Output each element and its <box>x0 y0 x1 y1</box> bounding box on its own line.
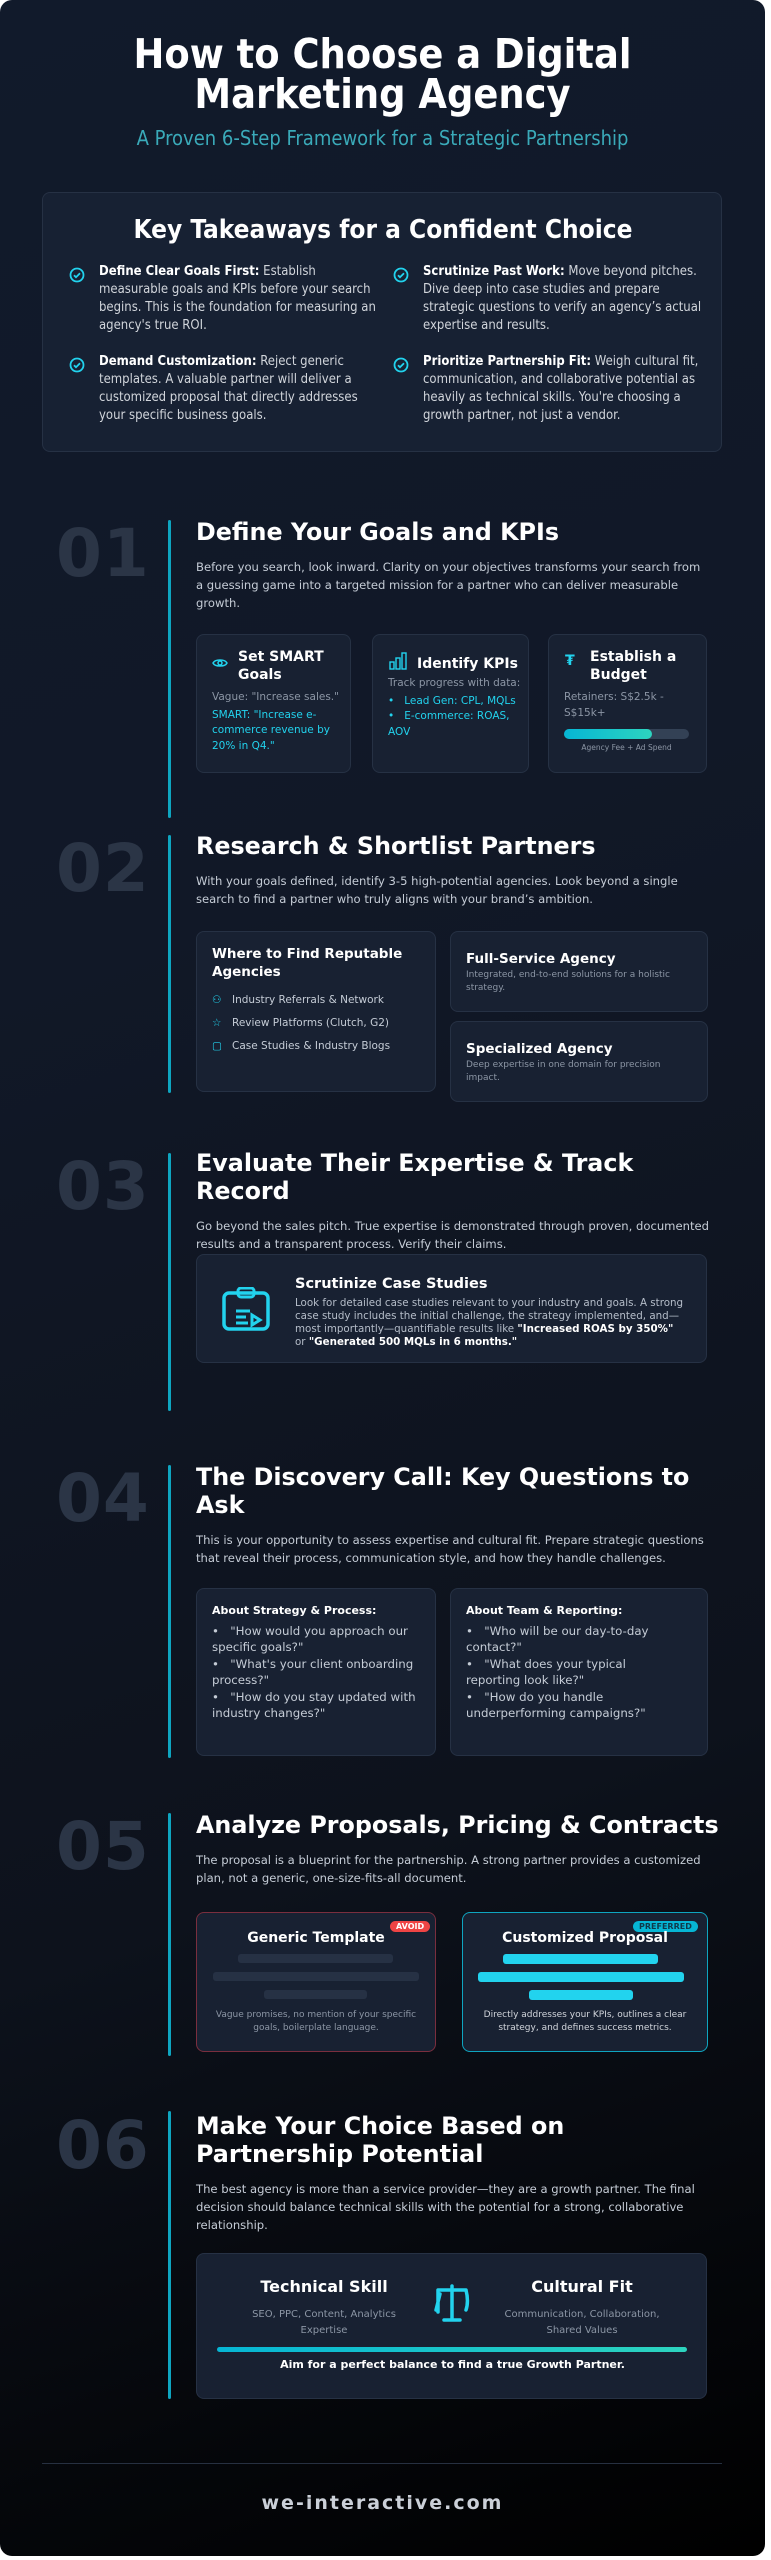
para 02: With your goals defined, identify 3-5 high-potential agencies. Look beyond a single search to find a partner who truly aligns with your brand’s ambition. <box>196 874 678 906</box>
timeline line 03 <box>168 1153 171 1411</box>
card: budget: Budget <box>590 667 647 683</box>
step number 04: 04 <box>56 1460 150 1537</box>
card: case studies: Look for detailed case studies relevant to your industry and goals. A strong case study includes the initial challenge, the strategy implemented, and—most importantly—quantifiable results like "Increased ROAS by 350%" or "Generated 500 MQLs in 6 months." <box>295 1297 683 1348</box>
card: KPIs: • Lead Gen: CPL, MQLs <box>388 694 516 706</box>
list: sources: ▢ <box>212 1040 222 1052</box>
list: sources: ☆ <box>212 1017 221 1029</box>
badge: avoid: AVOID <box>396 1922 424 1931</box>
card: generic template: Vague promises, no mention of your specific goals, boilerplate language. <box>216 2010 416 2033</box>
step number 01: 01 <box>56 515 150 592</box>
card: KPIs <box>372 634 529 773</box>
card: budget <box>548 634 707 773</box>
card: SMART goals: Set SMART <box>238 649 324 665</box>
heading 04: The Discovery Call: Key Questions to Ask <box>196 1463 689 1519</box>
step number 06: 06 <box>56 2107 150 2184</box>
card: balance <box>196 2253 707 2399</box>
step number 03: 03 <box>56 1148 150 1225</box>
takeaway 4: Prioritize Partnership Fit: Weigh cultural fit, communication, and collaborative potential as heavily as technical skills. You're choosing a growth partner, not just a vendor. <box>423 354 698 423</box>
card: balance: Cultural Fit <box>531 2277 633 2296</box>
step number 02: 02 <box>56 830 150 907</box>
icon: scale <box>434 2284 470 2322</box>
section 06 text <box>196 2112 695 2232</box>
icon: clipboard <box>222 1287 270 1331</box>
card: full-service <box>450 931 708 1012</box>
timeline line 02 <box>168 835 171 1093</box>
list: sources: ⚇ <box>212 994 221 1006</box>
icon: budget: ₮ <box>565 653 575 669</box>
card: balance: Aim for a perfect balance to find a true Growth Partner. <box>280 2358 625 2371</box>
card: strategy questions: • "How would you approach our specific goals?" <box>212 1624 408 1654</box>
card: budget: Agency Fee + Ad Spend <box>581 743 672 752</box>
card: team questions: • "How do you handle underperforming campaigns?" <box>466 1690 646 1720</box>
card: SMART goals: SMART: "Increase e-commerce revenue by 20% in Q4." <box>212 708 330 752</box>
takeaway 3: Demand Customization: Reject generic templates. A valuable partner will deliver a customized proposal that directly addresses your specific business goals. <box>99 354 358 423</box>
heading 03: Evaluate Their Expertise & Track Record <box>196 1149 633 1205</box>
takeaway 1: Define Clear Goals First: Establish measurable goals and KPIs before your search begins. This is the foundation for measuring an agency's true ROI. <box>99 264 376 333</box>
section 04 text <box>196 1463 704 1565</box>
timeline line 04 <box>168 1465 171 1758</box>
card: specialized <box>450 1021 708 1102</box>
card: strategy questions <box>196 1588 436 1756</box>
card: balance: Technical Skill <box>260 2277 388 2296</box>
para 05: The proposal is a blueprint for the partnership. A strong partner provides a customized plan, not a generic, one-size-fits-all document. <box>196 1853 701 1885</box>
budget bar <box>564 729 689 739</box>
takeaways heading: Key Takeaways for a Confident Choice <box>133 215 632 245</box>
takeaway 2: Scrutinize Past Work: Move beyond pitches. Dive deep into case studies and prepare strategic questions to verify an agency’s actual expertise and results. <box>423 264 701 333</box>
card: team questions: • "What does your typical reporting look like?" <box>466 1657 626 1686</box>
badge: avoid <box>390 1921 430 1932</box>
timeline line 01 <box>168 520 171 818</box>
section 05 text <box>196 1811 719 1885</box>
card: customized proposal: Customized Proposal <box>502 1930 668 1946</box>
card: strategy questions: • "What's your client onboarding process?" <box>212 1657 413 1686</box>
footer: website: we-interactive.com <box>262 2492 504 2514</box>
title: Marketing Agency <box>194 70 571 118</box>
card: where to find <box>196 931 436 1092</box>
para 06: The best agency is more than a service provider—they are a growth partner. The final decision should balance technical skills with the potential for a strong, collaborative relationship. <box>196 2182 695 2232</box>
card: KPIs: • E-commerce: ROAS, AOV <box>388 710 510 738</box>
card: SMART goals <box>196 634 351 773</box>
list: sources: Case Studies & Industry Blogs <box>232 1040 390 1052</box>
card: specialized: Deep expertise in one domain for precision impact. <box>466 1060 660 1083</box>
title: How to Choose a Digital <box>134 30 631 78</box>
card: generic template: Generic Template <box>247 1930 385 1946</box>
card: generic template <box>196 1912 436 2052</box>
card: balance: Communication, Collaboration, Shared Values <box>504 2309 660 2336</box>
para 03: Go beyond the sales pitch. True expertise is demonstrated through proven, documented results and a transparent process. Verify their claims. <box>196 1219 709 1251</box>
card: team questions: • "Who will be our day-to-day contact?" <box>466 1624 649 1654</box>
heading 02: Research & Shortlist Partners <box>196 832 596 860</box>
para 01: Before you search, look inward. Clarity on your objectives transforms your search from a guessing game into a targeted mission for a partner who can deliver measurable growth. <box>196 560 700 610</box>
card: balance: SEO, PPC, Content, Analytics Expertise <box>252 2309 396 2336</box>
card: SMART goals: Vague: "Increase sales." <box>212 691 339 703</box>
card: budget: Retainers: S$2.5k - S$15k+ <box>564 691 664 718</box>
card: SMART goals: Goals <box>238 667 282 683</box>
title <box>134 30 631 118</box>
balance bar <box>217 2347 687 2352</box>
list: sources <box>212 994 390 1052</box>
card: KPIs: Track progress with data: <box>388 677 520 689</box>
footer divider and site <box>42 2463 722 2464</box>
card: KPIs: Identify KPIs <box>417 656 518 672</box>
card: customized proposal <box>462 1912 708 2052</box>
card: budget: Establish a <box>590 649 676 665</box>
card: specialized: Specialized Agency <box>466 1041 613 1057</box>
section 01 text <box>196 518 700 610</box>
card: team questions: About Team & Reporting: <box>466 1604 622 1617</box>
card: where to find: Where to Find Reputable <box>212 946 402 962</box>
list: sources: Industry Referrals & Network <box>232 994 384 1006</box>
card: case studies <box>196 1254 707 1363</box>
step number 05: 05 <box>56 1808 150 1885</box>
card: where to find: Agencies <box>212 964 281 980</box>
card: strategy questions: About Strategy & Process: <box>212 1604 376 1617</box>
subtitle: A Proven 6-Step Framework for a Strategic Partnership <box>137 126 628 150</box>
card: case studies: Scrutinize Case Studies <box>295 1276 487 1292</box>
badge: preferred: PREFERRED <box>639 1922 692 1931</box>
section 03 text <box>196 1149 709 1251</box>
section 02 text <box>196 832 678 906</box>
timeline line 05 <box>168 1813 171 2056</box>
badge: preferred <box>633 1921 698 1932</box>
card: strategy questions: • "How do you stay updated with industry changes?" <box>212 1690 416 1720</box>
heading 05: Analyze Proposals, Pricing & Contracts <box>196 1811 719 1839</box>
list: sources: Review Platforms (Clutch, G2) <box>232 1017 389 1029</box>
icon: bar chart <box>389 652 407 670</box>
card: full-service: Full-Service Agency <box>466 951 616 967</box>
timeline line 06 <box>168 2111 171 2399</box>
heading 01: Define Your Goals and KPIs <box>196 518 559 546</box>
panel: key takeaways <box>42 192 722 452</box>
heading 06: Make Your Choice Based on Partnership Potential <box>196 2112 564 2168</box>
card: team questions <box>450 1588 708 1756</box>
card: customized proposal: Directly addresses your KPIs, outlines a clear strategy, and defines success metrics. <box>484 2010 686 2033</box>
para 04: This is your opportunity to assess expertise and cultural fit. Prepare strategic questions that reveal their process, communication style, and how they handle challenges. <box>196 1533 704 1565</box>
card: full-service: Integrated, end-to-end solutions for a holistic strategy. <box>466 970 670 993</box>
icon: eye <box>212 659 228 667</box>
